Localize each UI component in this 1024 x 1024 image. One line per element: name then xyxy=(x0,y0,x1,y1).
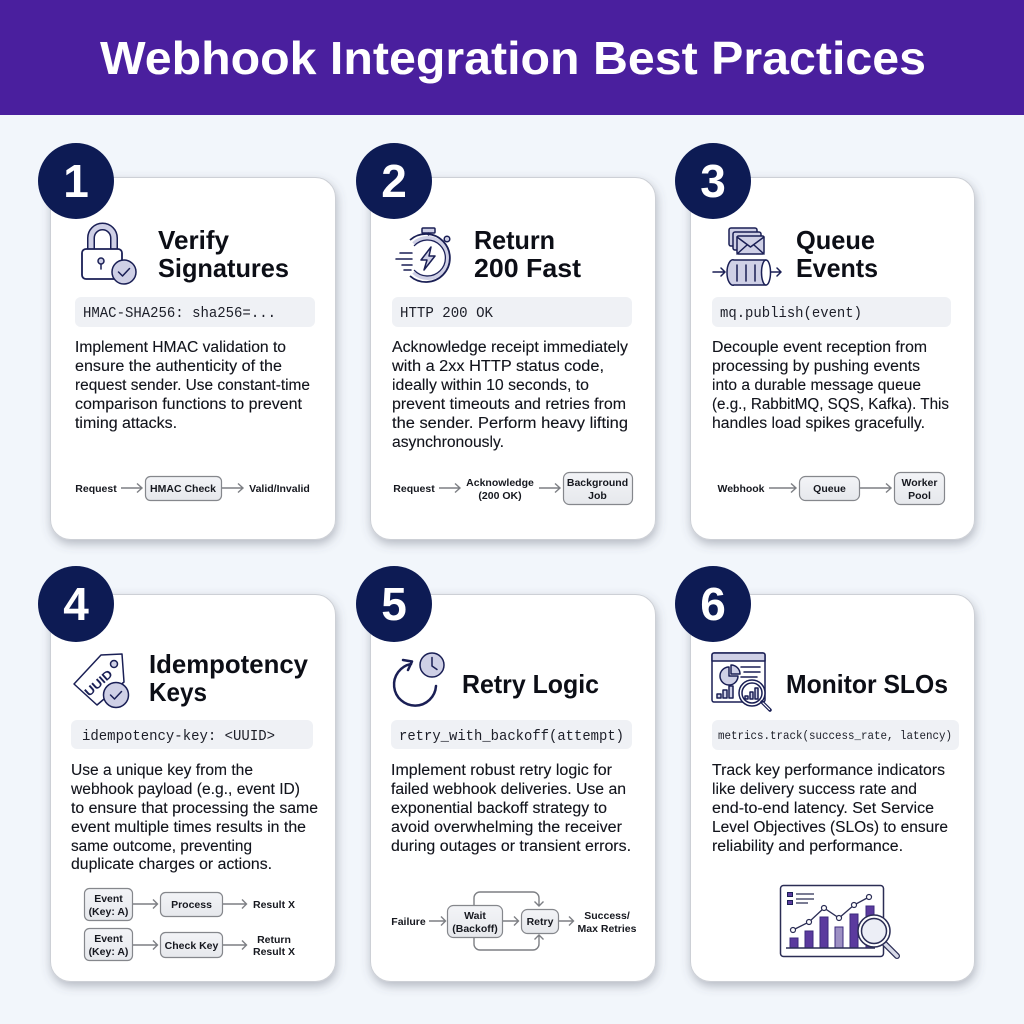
header band xyxy=(0,0,1024,115)
panel: 5 Retry Logic xyxy=(356,566,656,982)
number badge 3: 3 xyxy=(700,155,726,207)
description xyxy=(70,762,318,873)
description: ideally within 10 seconds, to xyxy=(392,377,589,394)
heading: Events xyxy=(796,253,878,283)
description xyxy=(75,339,310,432)
description: event multiple times results in the xyxy=(71,819,306,836)
description: duplicate charges or actions. xyxy=(71,856,272,873)
flow diagram: two paths: Result X xyxy=(253,899,295,911)
flow diagram: Worker xyxy=(902,477,938,489)
description: failed webhook deliveries. Use an xyxy=(391,781,626,798)
flow diagram: two paths xyxy=(84,888,295,960)
flow diagram with loop: Failure xyxy=(391,916,426,928)
description: same outcome, preventing xyxy=(71,838,252,855)
description: processing by pushing events xyxy=(712,358,920,375)
description xyxy=(391,339,628,451)
flow diagram with loop: Wait xyxy=(464,910,486,922)
description: Decouple event reception from xyxy=(712,339,927,356)
heading xyxy=(158,225,289,283)
flow diagram: Request xyxy=(75,483,117,495)
description: comparison functions to prevent xyxy=(75,396,303,413)
icon: UUID tag with check: UUID xyxy=(82,667,116,699)
flow diagram: two paths: Event xyxy=(94,893,123,905)
description: Acknowledge receipt immediately xyxy=(392,339,628,356)
description: Track key performance indicators xyxy=(712,762,945,779)
description: ensure the authenticity of the xyxy=(75,358,282,375)
panel: 2 Return 200 Fast xyxy=(356,143,656,540)
description: timing attacks. xyxy=(75,415,177,432)
heading: Monitor SLOs xyxy=(786,669,948,699)
number badge 2 xyxy=(356,143,432,219)
number badge 1: 1 xyxy=(63,155,89,207)
panel: 4 Idempotency Keys xyxy=(38,566,336,982)
code snippet: HMAC-SHA256: sha256=... xyxy=(83,306,276,322)
panel: 6 Monitor SLOs xyxy=(675,566,974,982)
flow diagram: (200 OK) xyxy=(478,490,522,502)
code snippet xyxy=(71,720,313,749)
description: prevent timeouts and retries from xyxy=(392,396,626,413)
code snippet xyxy=(712,297,951,327)
flow diagram xyxy=(393,472,632,504)
icon: dashboard with magnifier xyxy=(712,653,770,710)
heading: Verify xyxy=(158,225,230,255)
heading xyxy=(474,225,581,283)
flow diagram: Queue xyxy=(813,483,846,495)
heading: Return xyxy=(474,225,555,255)
number badge 3 xyxy=(675,143,751,219)
code snippet xyxy=(75,297,315,327)
flow diagram: two paths: Result X xyxy=(253,946,295,958)
icon: envelopes and queue xyxy=(713,228,781,285)
number badge 5 xyxy=(356,566,432,642)
heading xyxy=(149,649,309,707)
number badge 6: 6 xyxy=(700,578,726,630)
description: asynchronously. xyxy=(392,434,504,451)
flow diagram: two paths: (Key: A) xyxy=(89,906,128,918)
title: Webhook Integration Best Practices xyxy=(100,32,926,84)
flow diagram: two paths: Check Key xyxy=(165,940,219,952)
icon: UUID tag with check xyxy=(74,654,128,708)
description xyxy=(712,339,949,432)
icon: padlock with check xyxy=(82,226,136,284)
description: the sender. Perform heavy lifting xyxy=(392,415,628,432)
description: exponential backoff strategy to xyxy=(391,800,607,817)
flow diagram xyxy=(75,476,310,500)
icon: retry arrow with clock xyxy=(394,653,444,706)
description: into a durable message queue xyxy=(712,377,921,394)
heading: Queue xyxy=(796,225,875,255)
icon: stopwatch with bolt xyxy=(396,228,450,282)
flow diagram: HMAC Check xyxy=(150,483,216,495)
number badge 1 xyxy=(38,143,114,219)
description: request sender. Use constant-time xyxy=(75,377,310,394)
description: Level Objectives (SLOs) to ensure xyxy=(712,819,948,836)
code snippet: metrics.track(success_rate, latency) xyxy=(718,729,952,743)
number badge 6 xyxy=(675,566,751,642)
description: handles load spikes gracefully. xyxy=(712,415,925,432)
number badge 4 xyxy=(38,566,114,642)
heading: Retry Logic xyxy=(462,669,599,699)
flow diagram xyxy=(717,472,944,504)
panel: 1 Verify Signatures xyxy=(38,143,336,540)
number badge 4: 4 xyxy=(63,578,89,630)
flow diagram: two paths: (Key: A) xyxy=(89,946,128,958)
code snippet: mq.publish(event) xyxy=(720,306,862,322)
flow diagram: two paths: Process xyxy=(171,899,212,911)
heading: Signatures xyxy=(158,253,289,283)
description: to ensure that processing the same xyxy=(71,800,318,817)
description: like delivery success rate and xyxy=(712,781,917,798)
heading: Idempotency xyxy=(149,649,309,679)
panel: 3 Queue Events xyxy=(675,143,974,540)
flow diagram: Job xyxy=(588,490,607,502)
heading: Keys xyxy=(149,677,207,707)
heading: 200 Fast xyxy=(474,253,581,283)
flow diagram with loop: Max Retries xyxy=(578,923,637,935)
description: during outages or transient errors. xyxy=(391,838,631,855)
description: reliability and performance. xyxy=(712,838,903,855)
chart illustration with magnifier xyxy=(780,886,897,956)
description: Use a unique key from the xyxy=(71,762,253,779)
code snippet: idempotency-key: <UUID> xyxy=(82,729,275,745)
description: end-to-end latency. Set Service xyxy=(712,800,934,817)
flow diagram: Webhook xyxy=(717,483,765,495)
flow diagram with loop: Success/ xyxy=(584,910,630,922)
description: avoid overwhelming the receiver xyxy=(391,819,622,836)
flow diagram: Background xyxy=(567,477,628,489)
code snippet: retry_with_backoff(attempt) xyxy=(399,729,624,745)
description: (e.g., RabbitMQ, SQS, Kafka). This xyxy=(712,396,949,413)
code snippet xyxy=(391,720,632,749)
description: Implement robust retry logic for xyxy=(391,762,612,779)
flow diagram: Request xyxy=(393,483,435,495)
code snippet: HTTP 200 OK xyxy=(400,306,493,322)
flow diagram: Pool xyxy=(908,490,931,502)
flow diagram with loop: (Backoff) xyxy=(452,923,498,935)
code snippet xyxy=(392,297,632,327)
description: Implement HMAC validation to xyxy=(75,339,286,356)
description: webhook payload (e.g., event ID) xyxy=(70,781,300,798)
description: with a 2xx HTTP status code, xyxy=(391,358,604,375)
number badge 5: 5 xyxy=(381,578,407,630)
code snippet xyxy=(712,720,959,750)
flow diagram: two paths: Event xyxy=(94,933,123,945)
flow diagram with loop xyxy=(391,892,637,950)
description xyxy=(712,762,948,855)
heading xyxy=(796,225,878,283)
flow diagram: Valid/Invalid xyxy=(249,483,310,495)
flow diagram with loop: Retry xyxy=(527,916,554,928)
description xyxy=(391,762,631,855)
flow diagram: Acknowledge xyxy=(466,477,534,489)
flow diagram: two paths: Return xyxy=(257,934,291,946)
number badge 2: 2 xyxy=(381,155,407,207)
